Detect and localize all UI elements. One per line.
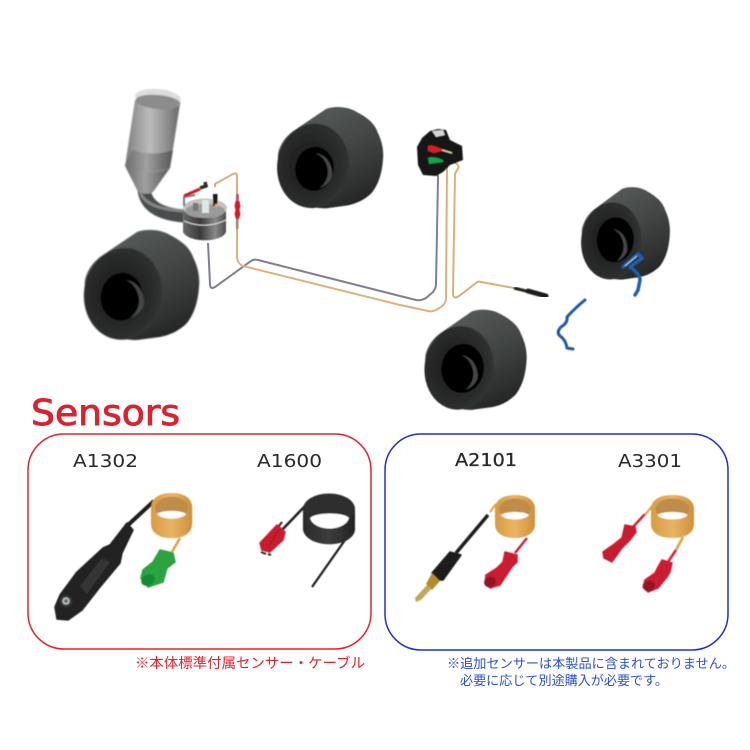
logger: silver unit: [183, 182, 227, 240]
sensor: A3301: [603, 495, 694, 593]
panel: optional sensors: [385, 434, 728, 650]
logger: black unit with red and green connectors: [417, 129, 463, 176]
heading: Sensors: Sensors: [31, 393, 180, 434]
wiring: orange sensor cable: [448, 158, 514, 297]
note: optional sensors (blue): ※追加センサーは本製品に含まれておりません。: [447, 656, 735, 671]
tire: rear left: [78, 230, 199, 345]
sensor: speed probe on cable: [514, 288, 546, 296]
wiring: orange main cable: [215, 156, 454, 311]
label: A1600: A1600: [257, 451, 322, 472]
tire: rear right: [272, 107, 383, 213]
panel: standard sensors: [28, 434, 371, 649]
sensor: A2101: [415, 495, 535, 602]
exhaust muffler: [125, 87, 184, 216]
label: A3301: A3301: [618, 451, 682, 472]
note: standard accessories (red): ※本体標準付属センサー・ケーブル: [135, 654, 365, 672]
note: optional sensors (blue): 必要に応じて別途購入が必要です。: [460, 673, 668, 688]
label: A1302: A1302: [73, 451, 138, 472]
sensor: blue wire detached: [558, 300, 585, 349]
tire: front left: [419, 310, 527, 414]
sensor: blue wire on front wheel: [623, 254, 642, 295]
note: optional sensors (blue): [447, 656, 735, 688]
label: A2101: A2101: [455, 450, 517, 471]
tire: front right: [577, 187, 670, 284]
inline red connector: [234, 194, 240, 229]
sensor: A1600: [260, 494, 355, 587]
sensor: A1302: [55, 493, 192, 620]
diagram: vehicle sensor layout: [78, 87, 670, 414]
wiring: grey cable: [208, 168, 438, 300]
